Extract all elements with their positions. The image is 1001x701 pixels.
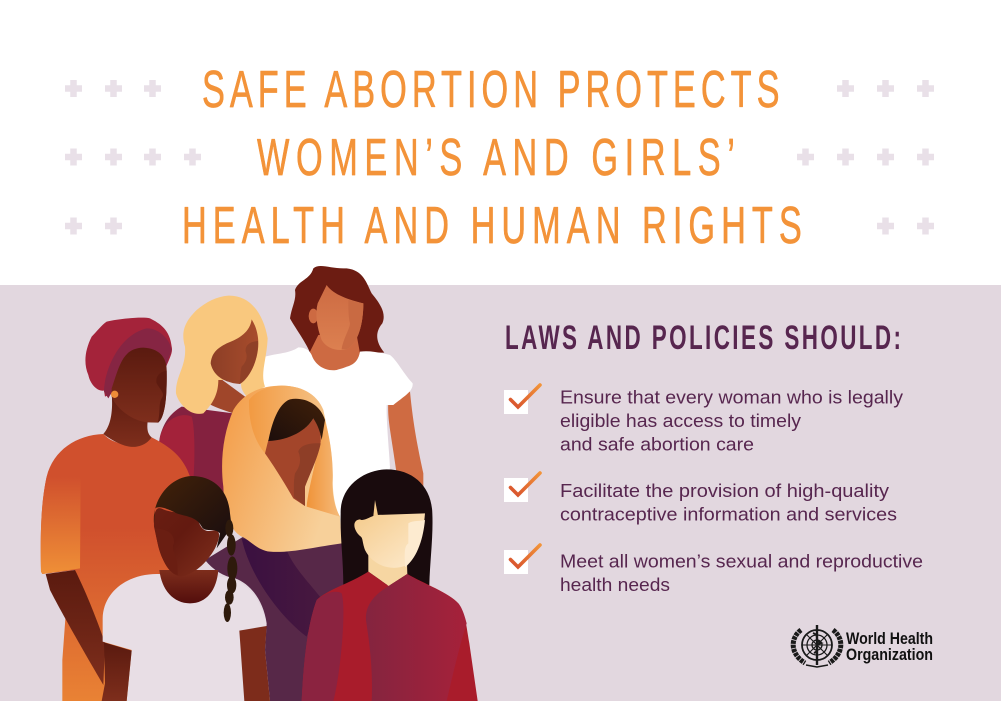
title: HEALTH AND HUMAN RIGHTS: [182, 197, 802, 255]
title: WOMEN’S AND GIRLS’: [257, 129, 735, 187]
icon: checkbox 1: [504, 385, 540, 414]
illustration: group of women: [41, 266, 478, 701]
heading: laws and policies: LAWS AND POLICIES SHOULD:: [505, 319, 901, 357]
text: organization name: [846, 629, 933, 664]
icon: checkbox 2: [504, 473, 540, 502]
figure: girl with braid: [102, 476, 270, 701]
figure: woman with blonde hair: [150, 296, 268, 493]
background panel: [0, 285, 1001, 701]
logo: World Health Organization: [793, 625, 933, 667]
text: item 1: and safe abortion care: [560, 434, 754, 454]
icon: earring: [111, 391, 118, 398]
text: item 2: Facilitate the provision of high-quality: [560, 480, 890, 501]
text: item 3: health needs: [560, 574, 670, 595]
figure: woman with brown wavy hair: [262, 266, 423, 527]
title: SAFE ABORTION PROTECTS: [202, 61, 780, 119]
figure: woman with long black hair: [302, 469, 478, 701]
text: item 1: [560, 386, 904, 454]
figure: woman with turban: [41, 318, 190, 701]
text: item 3: Meet all women’s sexual and reproductive: [560, 550, 923, 572]
list item 1: [504, 385, 904, 454]
title: [182, 61, 802, 255]
text: item 1: Ensure that every woman who is legally: [560, 386, 904, 408]
figure: woman with headscarf: [205, 386, 347, 701]
text: item 2: [560, 480, 897, 524]
text: item 3: [560, 550, 923, 595]
braid: [224, 520, 237, 622]
decorative plus pattern: [65, 80, 934, 234]
text: item 2: contraceptive information and services: [560, 504, 897, 524]
text: item 1: eligible has access to timely: [560, 410, 802, 431]
list item 2: [504, 473, 897, 524]
icon: WHO emblem: [793, 625, 841, 667]
text: organization name: Organization: [846, 645, 933, 664]
list item 3: [504, 545, 923, 595]
icon: checkbox 3: [504, 545, 540, 574]
text: organization name: World Health: [846, 629, 933, 648]
